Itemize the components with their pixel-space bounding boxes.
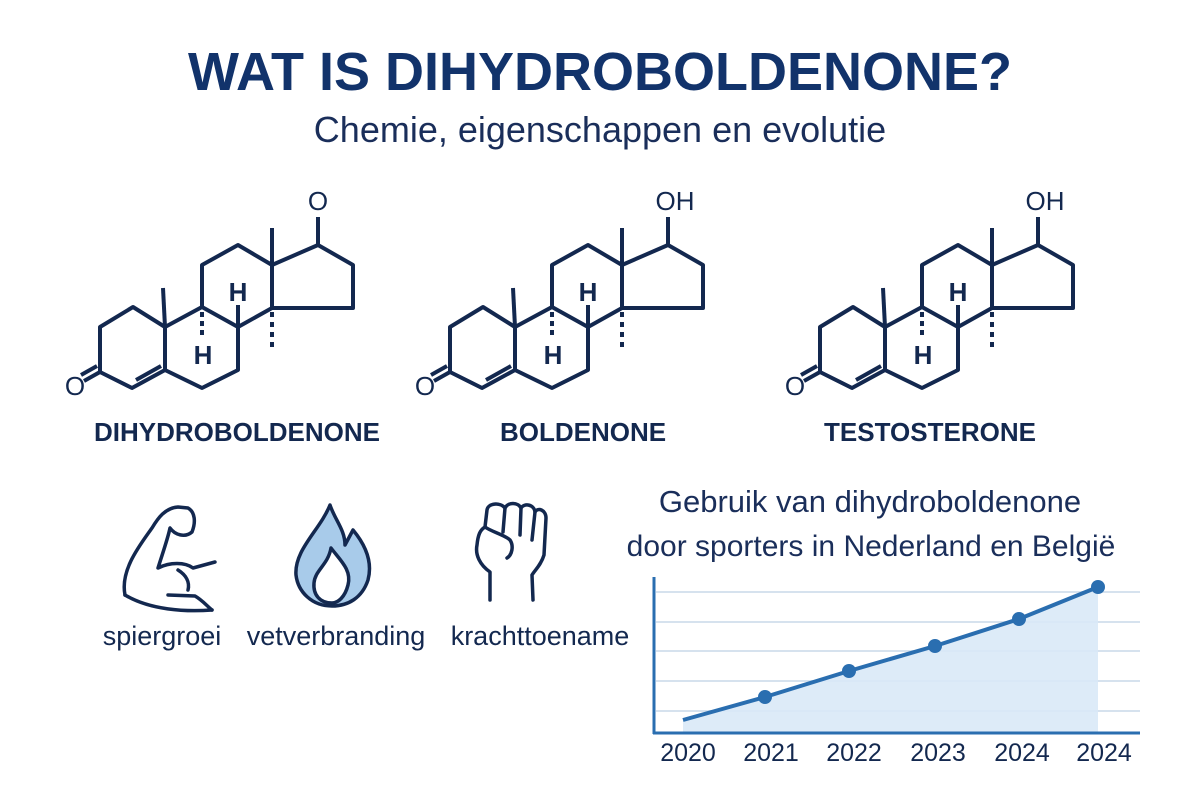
molecule: dihydroboldenone: H	[229, 277, 247, 307]
molecule: boldenone: BOLDENONE	[500, 417, 666, 447]
subtitle: Chemie, eigenschappen en evolutie	[314, 109, 886, 150]
line chart: 2024	[1076, 739, 1132, 767]
molecule: testosterone: TESTOSTERONE	[824, 417, 1036, 447]
line chart: 2023	[910, 739, 966, 767]
line chart: 2022	[826, 739, 882, 767]
molecule: boldenone: H	[579, 277, 597, 307]
label: vetverbranding: vetverbranding	[247, 621, 425, 651]
molecule: boldenone: O	[415, 371, 435, 401]
line chart: 2024	[994, 739, 1050, 767]
molecule: dihydroboldenone: H	[194, 340, 212, 370]
icon: muscle arm	[124, 507, 215, 611]
molecule: dihydroboldenone: O	[308, 186, 328, 216]
molecule: testosterone: H	[949, 277, 967, 307]
icon: flame	[296, 505, 369, 606]
molecule: testosterone: O	[785, 371, 805, 401]
icon: fist	[477, 504, 546, 600]
line chart	[653, 577, 1140, 767]
molecule: testosterone	[785, 186, 1073, 447]
title: WAT IS DIHYDROBOLDENONE?	[188, 42, 1012, 102]
molecule: dihydroboldenone: DIHYDROBOLDENONE	[94, 417, 380, 447]
label: spiergroei: spiergroei	[103, 621, 221, 651]
molecule: dihydroboldenone	[65, 186, 380, 447]
line chart: 2020	[660, 739, 716, 767]
line chart: 2021	[743, 739, 799, 767]
molecule: dihydroboldenone: O	[65, 371, 85, 401]
molecule: boldenone: H	[544, 340, 562, 370]
molecule: boldenone: OH	[656, 186, 694, 216]
molecule: testosterone: H	[914, 340, 932, 370]
molecule: testosterone: OH	[1026, 186, 1064, 216]
label: krachttoename: krachttoename	[451, 621, 629, 651]
chart title: Gebruik van dihydroboldenone	[659, 484, 1081, 519]
text: door sporters in Nederland en België	[627, 530, 1115, 563]
molecule: boldenone	[415, 186, 703, 447]
